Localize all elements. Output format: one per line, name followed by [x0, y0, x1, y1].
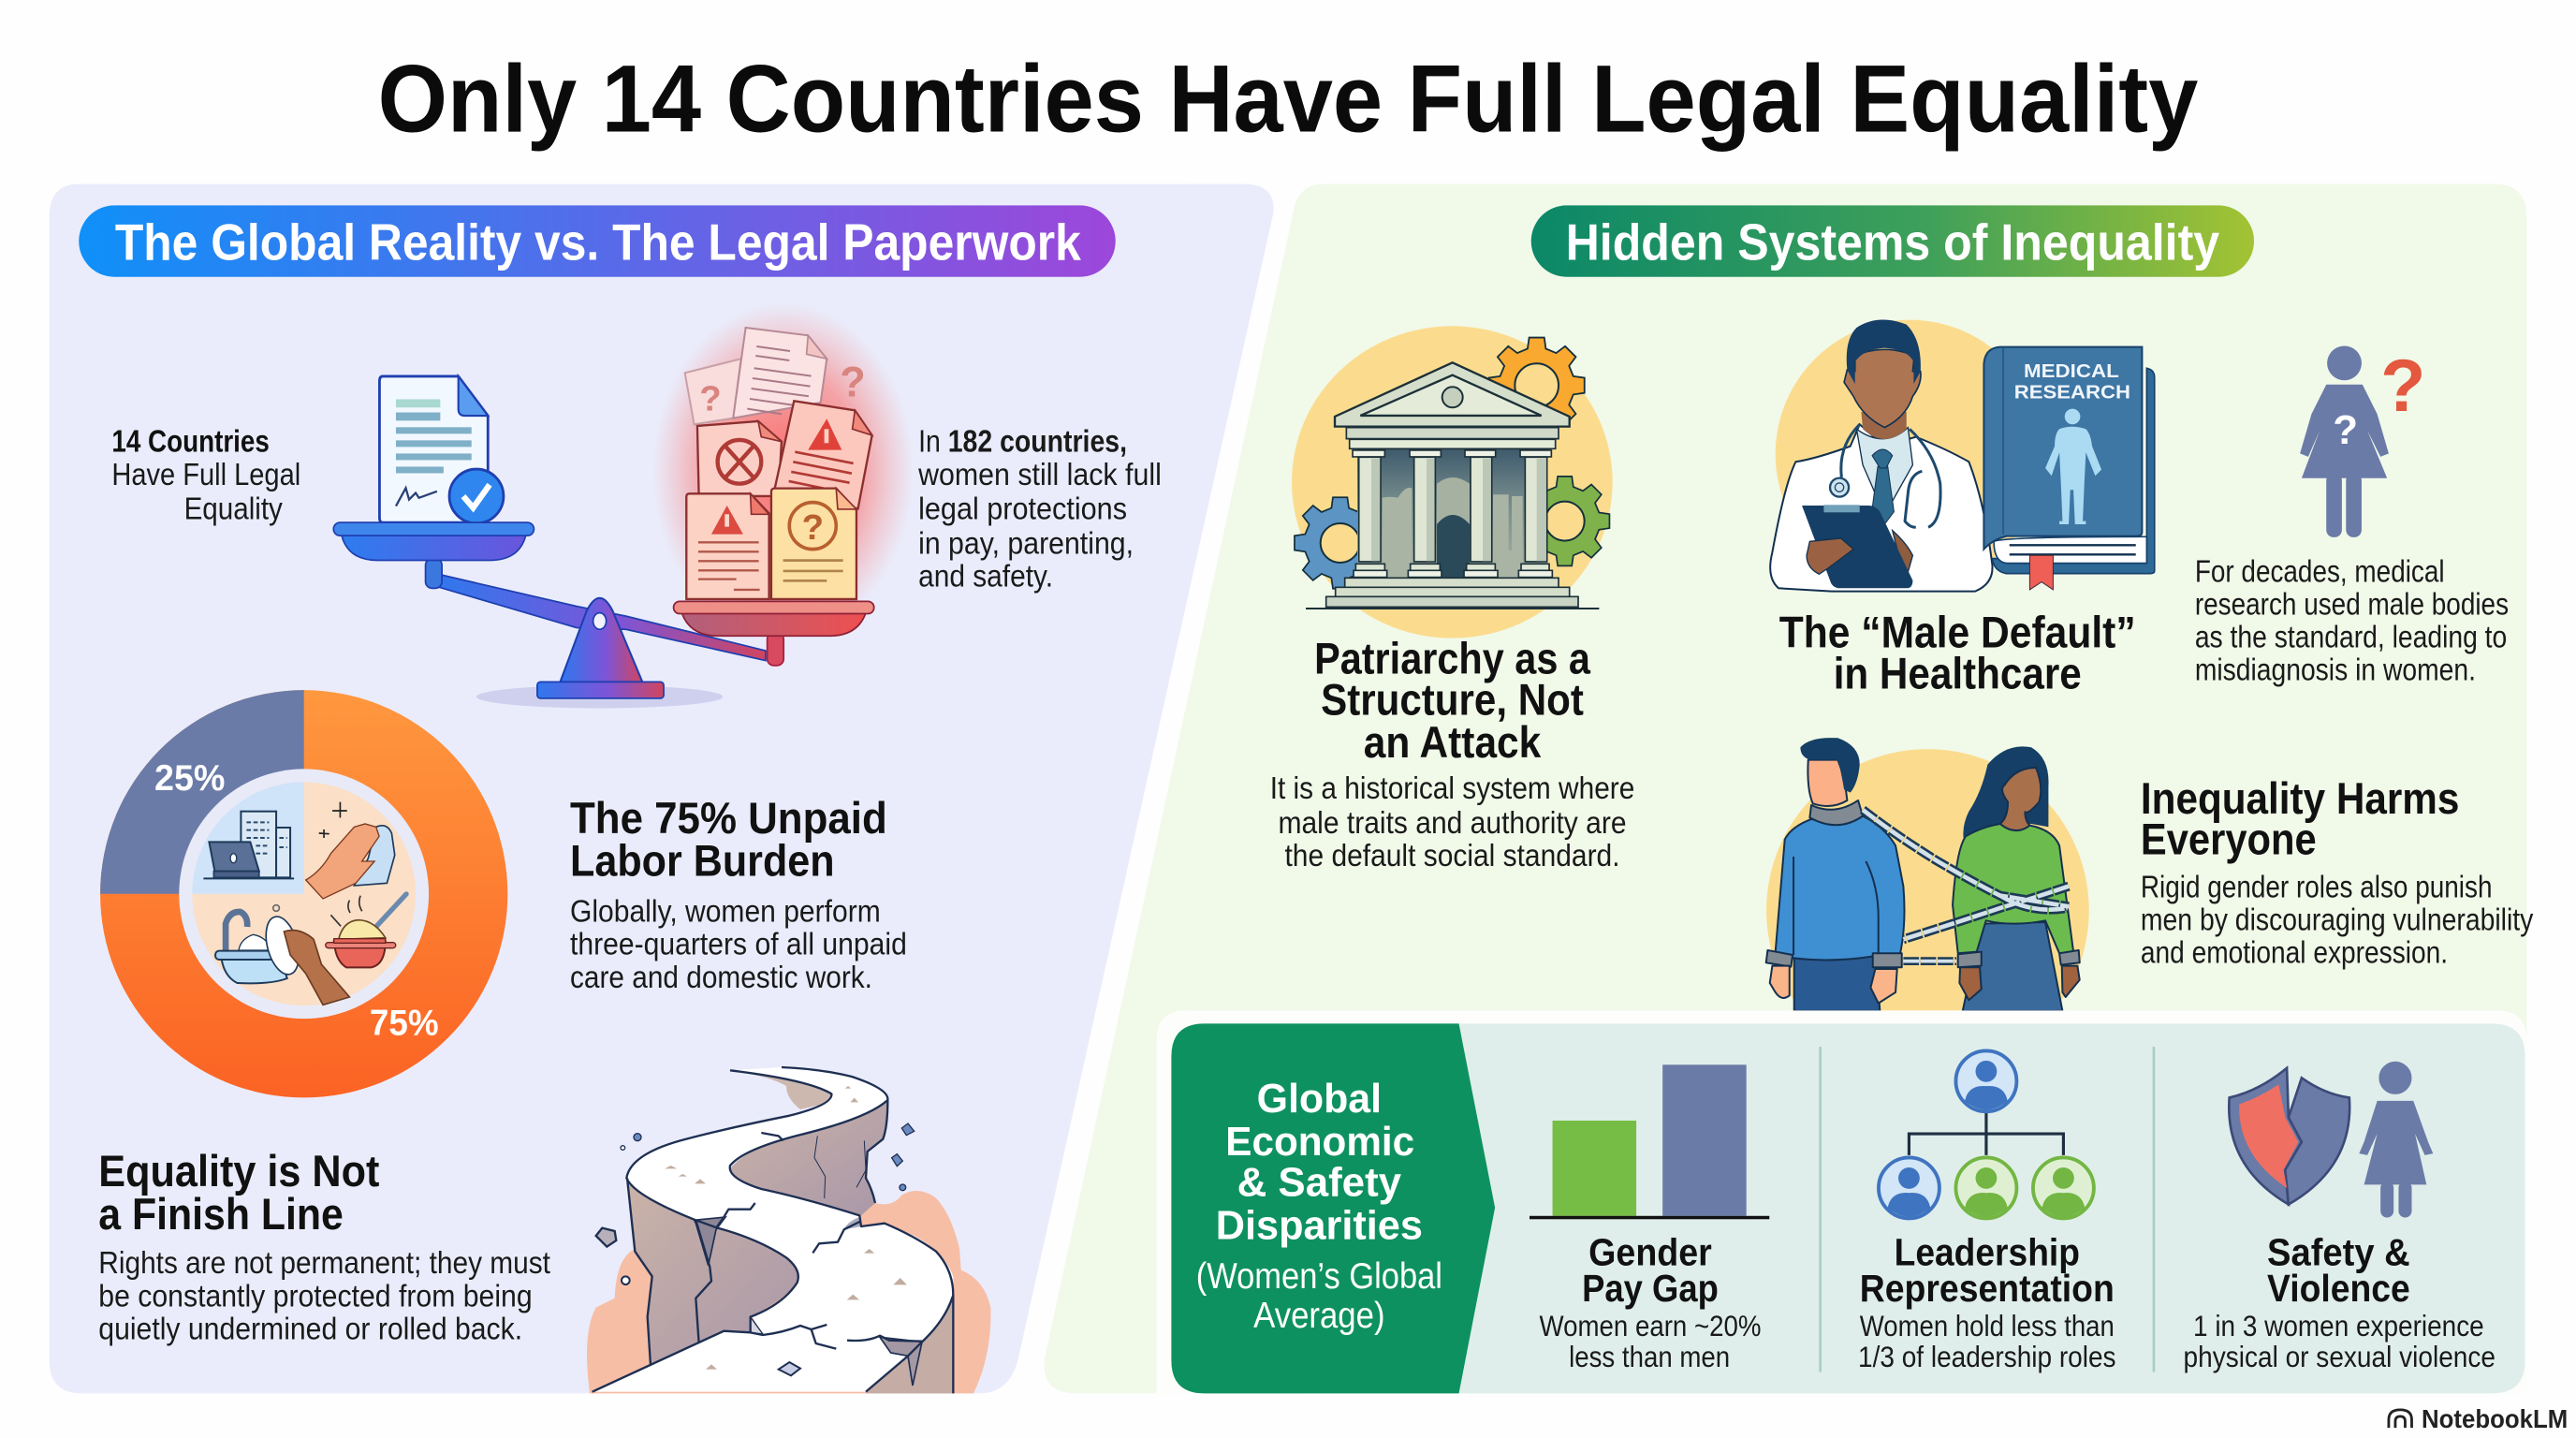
icons: office, cleaning, dishes, cooking: [203, 802, 406, 1005]
left document with check: [379, 376, 504, 523]
text block: 75% unpaid labor: The 75% Unpaid: [570, 794, 887, 844]
red glow pile of documents: ?: [802, 507, 824, 548]
text: safety and violence: 1 in 3 women experience: [2193, 1309, 2484, 1343]
text block: equality is not a finish line: be constantly protected from being: [98, 1279, 533, 1313]
text block: medical research: research used male bodies: [2195, 587, 2509, 622]
text: 14 countries: Equality: [184, 492, 283, 527]
text block: equality is not a finish line: Rights are not permanent; they must: [98, 1246, 551, 1281]
text: leadership representation: Leadership: [1895, 1230, 2080, 1273]
label: 75%: 75%: [370, 1004, 439, 1044]
text: safety and violence: Violence: [2267, 1267, 2410, 1310]
text: gender pay gap: [1540, 1230, 1761, 1373]
doctor: [1770, 320, 1993, 592]
panel: the global reality vs. the legal paperwork: [50, 184, 1274, 1393]
icon: woman silhouette with question mark: ?: [2333, 407, 2358, 453]
woman: [1953, 746, 2080, 1011]
text block: inequality harms everyone: [2141, 774, 2534, 970]
text block: medical research: as the standard, leading to: [2195, 621, 2507, 655]
person top: [1955, 1050, 2016, 1111]
text block: male default in healthcare: in Healthcare: [1834, 649, 2082, 698]
gear: blue: [1295, 497, 1385, 589]
icon: woman silhouette with question mark: [2300, 345, 2425, 537]
person left: [1879, 1157, 1939, 1218]
icon: doctor with medical research book: [1770, 320, 2155, 592]
book: medical research: RESEARCH: [2014, 382, 2130, 404]
icon: hand wiping with cloth: [306, 802, 395, 899]
book: medical research: MEDICAL: [2024, 360, 2119, 382]
banner: green label: Disparities: [1216, 1202, 1423, 1248]
heading pill: hidden systems: Hidden Systems of Inequality: [1566, 213, 2219, 271]
text block: equality is not a finish line: a Finish Line: [98, 1190, 344, 1240]
text block: male default in healthcare: The “Male Default”: [1779, 609, 2136, 658]
text block: patriarchy as a structure: Structure, Not: [1321, 675, 1584, 725]
text block: 75% unpaid labor: Labor Burden: [570, 836, 835, 886]
text block: patriarchy as a structure: [1270, 635, 1634, 873]
text: 182 countries: [917, 425, 1162, 594]
label: 25%: 25%: [154, 758, 225, 799]
text block: patriarchy as a structure: It is a historical system where: [1270, 771, 1634, 806]
text: safety and violence: Safety &: [2267, 1230, 2410, 1273]
banner: green label: & Safety: [1237, 1160, 1402, 1206]
text block: 75% unpaid labor: three-quarters of all unpaid: [570, 928, 907, 962]
text block: inequality harms everyone: Everyone: [2141, 815, 2317, 865]
text block: inequality harms everyone: Rigid gender roles also punish: [2141, 870, 2492, 904]
panel: global economic and safety disparities: [1157, 1010, 2526, 1393]
text: leadership representation: 1/3 of leadership roles: [1858, 1340, 2116, 1373]
text block: equality is not a finish line: Equality is Not: [98, 1147, 380, 1196]
text: gender pay gap: Women earn ~20%: [1540, 1309, 1761, 1343]
text: 14 countries: Have Full Legal: [111, 458, 300, 492]
text block: 75% unpaid labor: Globally, women perform: [570, 895, 881, 930]
text block: inequality harms everyone: and emotional expression.: [2141, 935, 2448, 970]
text block: medical research: [2195, 554, 2509, 688]
text: 182 countries: women still lack full: [917, 458, 1162, 492]
icon: balance scale with documents: [333, 302, 915, 708]
banner: green label: Global: [1257, 1076, 1382, 1122]
panel: hidden systems of inequality: [1045, 184, 2534, 1393]
text: leadership representation: [1858, 1230, 2116, 1373]
text: 14 countries: [111, 425, 300, 527]
banner: green label: (Women’s Global: [1196, 1256, 1442, 1297]
gear: orange: [1489, 338, 1585, 433]
text: 182 countries: and safety.: [918, 560, 1053, 594]
icon: woman silhouette with question mark: ?: [2380, 345, 2425, 427]
heading pill: global reality: The Global Reality vs. The Legal Paperwork: [115, 213, 1082, 271]
icon: office building and laptop: [203, 812, 294, 878]
text block: 75% unpaid labor: care and domestic work.: [570, 961, 872, 995]
text block: patriarchy as a structure: Patriarchy as a: [1314, 635, 1591, 684]
gear: green: [1520, 477, 1609, 565]
icon: cooking pot: [326, 894, 406, 967]
text: 182 countries: legal protections: [918, 492, 1127, 527]
text block: medical research: misdiagnosis in women.: [2195, 653, 2476, 688]
icon: man and woman chained together: [1766, 738, 2089, 1011]
text block: male default in healthcare: [1779, 609, 2136, 698]
text: safety and violence: physical or sexual violence: [2184, 1340, 2496, 1373]
text: leadership representation: Representation: [1860, 1267, 2115, 1310]
banner: green label: [1171, 1023, 1495, 1393]
text block: patriarchy as a structure: male traits and authority are: [1278, 806, 1627, 841]
text: 14 countries: 14 Countries: [111, 425, 270, 460]
icon: crumbling road on a cliff: [587, 1067, 990, 1393]
red glow pile of documents: [652, 302, 915, 639]
icon: broken shield and woman: [2229, 1062, 2433, 1218]
banner: green label: Economic: [1225, 1119, 1414, 1165]
text: 182 countries: in pay, parenting,: [918, 526, 1134, 561]
text: 182 countries: In 182 countries,: [918, 425, 1127, 460]
icon: washing dishes: [215, 905, 349, 1005]
text: safety and violence: [2184, 1230, 2496, 1373]
text block: medical research: For decades, medical: [2195, 554, 2445, 589]
text: gender pay gap: Gender: [1588, 1230, 1712, 1273]
icon: classical temple with gears: [1292, 326, 1613, 638]
person right: [2033, 1157, 2094, 1218]
text block: equality is not a finish line: quietly undermined or rolled back.: [98, 1312, 522, 1346]
red glow pile of documents: ?: [840, 358, 866, 405]
banner: green label: Average): [1253, 1296, 1385, 1336]
text block: patriarchy as a structure: the default social standard.: [1284, 839, 1620, 873]
text block: inequality harms everyone: Inequality Harms: [2141, 774, 2459, 824]
person centre: [1955, 1157, 2016, 1218]
text block: equality is not a finish line: [98, 1147, 551, 1346]
red glow pile of documents: ?: [699, 378, 722, 418]
book: medical research: [1983, 347, 2155, 590]
title: Only 14 Countries Have Full Legal Equality: [378, 45, 2199, 152]
text: leadership representation: Women hold less than: [1860, 1309, 2115, 1343]
bar chart: gender pay gap: [1530, 1064, 1769, 1219]
text: gender pay gap: less than men: [1569, 1340, 1730, 1373]
text block: patriarchy as a structure: an Attack: [1364, 718, 1542, 768]
man: [1766, 738, 1905, 1011]
chains: [1863, 810, 2069, 961]
text block: 75% unpaid labor: [570, 794, 907, 995]
icon: leadership org chart: [1879, 1050, 2094, 1218]
logo: NotebookLM: NotebookLM: [2422, 1404, 2568, 1433]
text: gender pay gap: Pay Gap: [1582, 1267, 1719, 1310]
donut chart: 75% unpaid labor: [100, 690, 507, 1097]
